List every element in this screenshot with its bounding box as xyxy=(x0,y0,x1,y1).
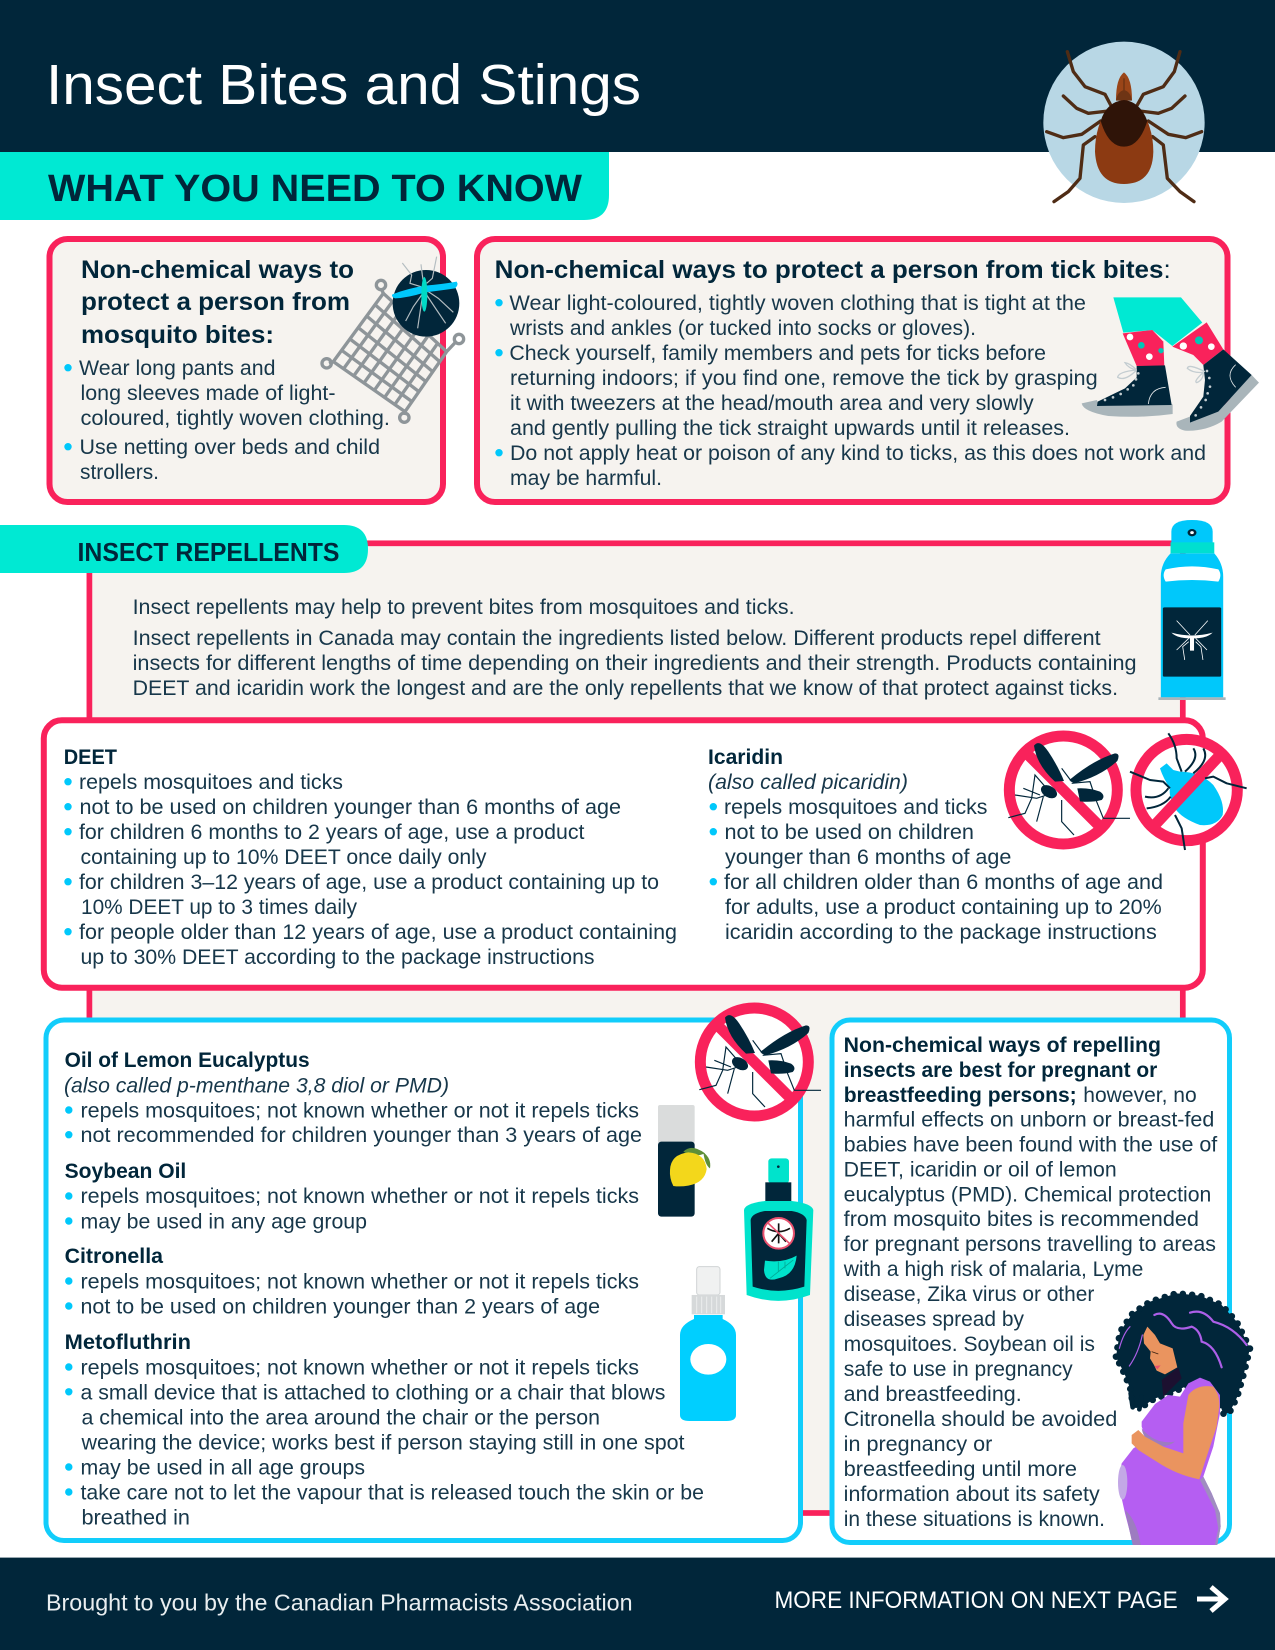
text: DEET: containing up to 10% DEET once daily only xyxy=(80,846,487,869)
text: pregnancy guidance: with a high risk of malaria, Lyme xyxy=(843,1258,1143,1281)
header banner xyxy=(0,0,1275,152)
icon: lemon roll-on bottle xyxy=(658,1105,710,1217)
section heading: WHAT YOU NEED TO KNOW xyxy=(48,168,582,210)
heading: mosquito bites: protect a person from xyxy=(81,288,350,316)
text: soybean oil xyxy=(65,1160,639,1233)
panel: other repellent ingredients xyxy=(46,1008,821,1540)
text: soybean oil: Soybean Oil xyxy=(65,1160,186,1183)
text: DEET: 10% DEET up to 3 times daily xyxy=(81,896,357,919)
text: pregnancy guidance: mosquitoes. Soybean oil is xyxy=(844,1333,1095,1356)
text: mosquito protection list xyxy=(64,357,390,484)
text: oil of lemon eucalyptus: not recommended for children younger than 3 years of age xyxy=(80,1124,642,1147)
text: pregnancy guidance: breastfeeding until more xyxy=(844,1458,1077,1481)
text: mosquito protection list: coloured, tightly woven clothing. xyxy=(80,407,390,430)
text: oil of lemon eucalyptus: Oil of Lemon Eucalyptus xyxy=(65,1049,310,1072)
icon: spray can xyxy=(1158,520,1226,700)
text: mosquito protection list: strollers. xyxy=(80,461,159,484)
text: oil of lemon eucalyptus: repels mosquitoes; not known whether or not it repels ticks xyxy=(80,1100,639,1122)
text: tick protection list: returning indoors; if you find one, remove the tick by grasping xyxy=(510,367,1098,390)
icon: mosquito net xyxy=(322,257,464,422)
text: metofluthrin: Metofluthrin xyxy=(65,1331,191,1354)
text: icaridin: (also called picaridin) xyxy=(708,771,908,794)
title: Insect Bites and Stings xyxy=(46,53,641,117)
text: repellent introduction xyxy=(133,596,1137,700)
text: pregnancy guidance: diseases spread by xyxy=(844,1308,1024,1331)
section band: what you need to know xyxy=(0,152,609,220)
text: pregnancy guidance: for pregnant persons travelling to areas xyxy=(844,1233,1216,1256)
heading: tick bites: Non-chemical ways to protect a person from tick bites : xyxy=(495,256,1171,284)
text: tick protection list: may be harmful. xyxy=(510,467,662,490)
panel: pregnant and breastfeeding persons xyxy=(832,1020,1250,1545)
text: metofluthrin: wearing the device; works best if person staying still in one spot xyxy=(80,1432,685,1454)
text: pregnancy guidance xyxy=(843,1034,1217,1531)
text: soybean oil: may be used in any age group xyxy=(80,1210,367,1233)
arrow: next page xyxy=(1197,1587,1225,1611)
panel: DEET and icaridin xyxy=(44,720,1247,988)
text: pregnancy guidance: harmful effects on unborn or breast-fed xyxy=(844,1108,1214,1132)
text: pregnancy guidance: babies have been found with the use of xyxy=(844,1134,1217,1156)
text: DEET: DEET xyxy=(64,746,117,769)
text: metofluthrin: breathed in xyxy=(82,1506,190,1530)
text: DEET: for children 3–12 years of age, use a product containing up to xyxy=(79,871,659,894)
text: repellent introduction: DEET and icaridin work the longest and are the only repellents that we know of that protect against ticks. xyxy=(133,677,1118,700)
icon: no mosquitoes xyxy=(1008,736,1130,844)
text: icaridin xyxy=(708,746,1163,944)
text: tick protection list: Wear light-coloured, tightly woven clothing that is tight at the xyxy=(509,292,1086,315)
panel: tick bite protection xyxy=(477,239,1259,502)
text: oil of lemon eucalyptus: (also called p-menthane 3,8 diol or PMD) xyxy=(64,1074,449,1098)
text: metofluthrin: a chemical into the area around the chair or the person xyxy=(82,1406,600,1430)
text: repellent introduction: Insect repellents in Canada may contain the ingredients listed below. Different products repel different xyxy=(133,627,1101,650)
heading: mosquito bites: mosquito bites: xyxy=(81,321,274,349)
panel: insect repellents xyxy=(0,520,1226,1513)
section band: insect repellents xyxy=(0,525,368,573)
text: icaridin: for adults, use a product containing up to 20% xyxy=(725,896,1162,919)
footer banner xyxy=(0,1558,1275,1650)
icon: blue spray bottle xyxy=(680,1267,736,1421)
text: citronella: repels mosquitoes; not known whether or not it repels ticks xyxy=(80,1271,639,1294)
text: oil of lemon eucalyptus xyxy=(64,1049,642,1147)
text: pregnancy guidance: breastfeeding persons; xyxy=(844,1084,1077,1107)
text: pregnancy guidance: from mosquito bites is recommended xyxy=(844,1208,1199,1231)
text: pregnancy guidance: DEET, icaridin or oil of lemon xyxy=(844,1158,1117,1182)
heading: mosquito bites xyxy=(81,256,354,349)
text: citronella: not to be used on children younger than 2 years of age xyxy=(80,1295,600,1318)
text: mosquito protection list: Wear long pants and xyxy=(79,357,276,380)
text: tick protection list: and gently pulling the tick straight upwards until it releases. xyxy=(510,417,1070,440)
text: repellent introduction: insects for different lengths of time depending on their ingredients and their strength. Products containing xyxy=(133,652,1137,675)
footer credit: Brought to you by the Canadian Pharmacists Association xyxy=(46,1590,633,1616)
text: icaridin: younger than 6 months of age xyxy=(725,846,1011,869)
text: DEET: not to be used on children younger than 6 months of age xyxy=(80,796,621,819)
text: icaridin: repels mosquitoes and ticks xyxy=(724,796,988,819)
text: mosquito protection list: Use netting over beds and child xyxy=(80,436,380,459)
text: tick protection list: it with tweezers at the head/mouth area and very slowly xyxy=(510,392,1034,415)
text: icaridin: for all children older than 6 months of age and xyxy=(724,871,1163,894)
text: repellent introduction: Insect repellents may help to prevent bites from mosquitoes and ticks. xyxy=(133,596,795,619)
text: tick protection list: Check yourself, family members and pets for ticks before xyxy=(509,342,1046,365)
text: pregnancy guidance: Non-chemical ways of repelling xyxy=(844,1034,1161,1057)
panel: mosquito bite protection xyxy=(50,239,464,502)
text: icaridin: not to be used on children xyxy=(724,821,974,844)
text: pregnancy guidance: Citronella should be avoided xyxy=(844,1408,1117,1431)
text: DEET: up to 30% DEET according to the package instructions xyxy=(80,946,594,969)
text: tick protection list: wrists and ankles (or tucked into socks or gloves). xyxy=(509,317,976,340)
text: icaridin: Icaridin xyxy=(708,746,783,769)
text: citronella: Citronella xyxy=(65,1245,163,1268)
text: soybean oil: repels mosquitoes; not known whether or not it repels ticks xyxy=(80,1185,639,1208)
text: citronella xyxy=(65,1245,639,1318)
icon: no mosquitoes (upper) xyxy=(699,1008,821,1116)
text: DEET: for children 6 months to 2 years of age, use a product xyxy=(79,821,585,844)
icon: tick in circle xyxy=(1043,42,1205,203)
icon: pregnant person xyxy=(1116,1293,1250,1545)
text: metofluthrin: repels mosquitoes; not known whether or not it repels ticks xyxy=(80,1356,639,1379)
next page note: MORE INFORMATION ON NEXT PAGE xyxy=(774,1587,1178,1614)
text: tick protection list: Do not apply heat or poison of any kind to ticks, as this does not work and xyxy=(510,442,1206,465)
icon: teal pump bottle xyxy=(744,1158,813,1301)
text: pregnancy guidance: insects are best for pregnant or xyxy=(844,1059,1157,1082)
text: pregnancy guidance: and breastfeeding. xyxy=(844,1383,1022,1406)
text: mosquito protection list: long sleeves made of light- xyxy=(80,382,336,405)
icon: legs with tucked socks and shoes xyxy=(1082,297,1259,431)
text: pregnancy guidance: eucalyptus (PMD). Chemical protection xyxy=(844,1183,1211,1206)
text: metofluthrin: a small device that is attached to clothing or a chair that blows xyxy=(80,1381,665,1404)
text: pregnancy guidance: in these situations is known. xyxy=(844,1508,1105,1531)
text: pregnancy guidance: however, no xyxy=(1083,1084,1197,1107)
text: metofluthrin: may be used in all age groups xyxy=(80,1457,365,1480)
text: metofluthrin xyxy=(65,1331,704,1530)
text: icaridin: icaridin according to the package instructions xyxy=(725,921,1157,944)
text: pregnancy guidance: safe to use in pregnancy xyxy=(844,1358,1073,1381)
text: DEET: repels mosquitoes and ticks xyxy=(79,771,343,794)
icon: no ticks xyxy=(1130,733,1247,850)
text: metofluthrin: take care not to let the vapour that is released touch the skin or be xyxy=(80,1482,704,1505)
heading: mosquito bites: Non-chemical ways to xyxy=(81,256,354,284)
text: pregnancy guidance: information about its safety xyxy=(844,1483,1100,1506)
text: pregnancy guidance: disease, Zika virus or other xyxy=(844,1283,1094,1306)
text: tick protection list xyxy=(495,292,1206,490)
text: pregnancy guidance: in pregnancy or xyxy=(844,1433,992,1456)
section heading: INSECT REPELLENTS xyxy=(78,537,340,567)
text: DEET: for people older than 12 years of age, use a product containing xyxy=(79,921,677,944)
text: DEET xyxy=(64,746,677,969)
